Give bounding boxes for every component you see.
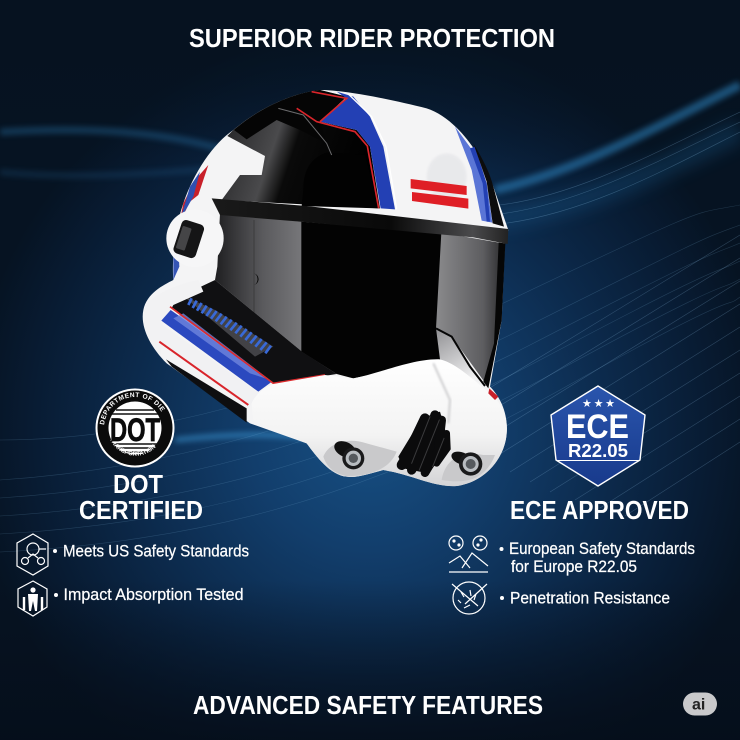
visor seam bbox=[253, 220, 255, 317]
ear disc bbox=[166, 210, 224, 267]
right port bbox=[450, 449, 482, 476]
visor left grey bbox=[215, 213, 302, 352]
visor right wedge bbox=[436, 328, 485, 386]
visor lower line bbox=[436, 328, 485, 386]
left port bbox=[332, 438, 364, 469]
ai badge bbox=[683, 692, 717, 716]
red edging bbox=[297, 92, 379, 208]
helmet illustration bbox=[143, 90, 508, 486]
ECE bullet two: Penetration Resistance bbox=[510, 588, 670, 608]
DOT heading bbox=[79, 469, 203, 525]
badge ring text: DEPARTMENT OF DIE bbox=[100, 392, 165, 425]
lower side panel bbox=[170, 280, 337, 384]
nose grille bbox=[398, 412, 450, 473]
ECE bullet one bbox=[500, 539, 695, 576]
black dome bbox=[222, 90, 380, 208]
brow band bbox=[212, 198, 508, 244]
badge R22.05: R22.05 bbox=[568, 441, 628, 461]
visor black rim bbox=[483, 243, 505, 388]
white jaw stripe bbox=[159, 323, 258, 408]
ECE heading: ECE APPROVED bbox=[510, 495, 689, 525]
badge lower ring text: TRANSPORTATION bbox=[110, 440, 156, 456]
DOT heading: DOT bbox=[113, 469, 163, 499]
badge stars: ★ ★ ★ bbox=[582, 398, 615, 410]
red side accent bbox=[488, 388, 498, 400]
title: SUPERIOR RIDER PROTECTION bbox=[189, 23, 555, 53]
red bars bbox=[411, 179, 468, 209]
right blue stripe bbox=[455, 127, 492, 223]
dome top black bbox=[234, 90, 347, 143]
vent slats bbox=[188, 298, 271, 353]
right black edge bbox=[473, 143, 504, 227]
white line bbox=[348, 94, 397, 209]
dome seam bbox=[278, 108, 332, 155]
visor right grey bbox=[436, 233, 503, 385]
ECE badge bbox=[551, 386, 645, 486]
DOT badge bbox=[96, 388, 174, 468]
badge ECE: ECE bbox=[566, 408, 629, 446]
DOT heading: CERTIFIED bbox=[79, 495, 203, 525]
black underside bbox=[166, 359, 247, 423]
footer heading: ADVANCED SAFETY FEATURES bbox=[193, 690, 543, 720]
badge DOT letters: DOT bbox=[110, 412, 160, 448]
ai badge: ai bbox=[692, 696, 705, 714]
screw bbox=[254, 273, 259, 285]
dome centre black panel bbox=[302, 153, 379, 208]
left blue and red trim bbox=[173, 165, 208, 280]
icon: rider shield bbox=[18, 581, 47, 616]
visor centre bbox=[301, 222, 442, 378]
crown highlight bbox=[427, 153, 467, 200]
ECE bullet one: for Europe R22.05 bbox=[511, 557, 637, 576]
blue stripe bbox=[320, 92, 395, 209]
lower red line bbox=[159, 342, 248, 405]
blue jaw stripe bbox=[161, 310, 272, 392]
helmet shell bbox=[143, 90, 508, 486]
red jaw line bbox=[170, 307, 325, 383]
DOT bullet one: Meets US Safety Standards bbox=[63, 542, 249, 560]
face mask bbox=[252, 359, 507, 486]
ear knob bbox=[172, 219, 205, 259]
DOT bullet two: Impact Absorption Tested bbox=[64, 585, 244, 604]
icon: penetration bbox=[452, 582, 487, 614]
nose shading bbox=[433, 363, 450, 423]
mask recess shading bbox=[323, 441, 495, 481]
white jaw tube bbox=[144, 280, 203, 355]
icon: wheels shield bbox=[17, 534, 48, 575]
icon: standards bbox=[449, 536, 488, 572]
ECE bullet one: European Safety Standards bbox=[509, 539, 695, 558]
